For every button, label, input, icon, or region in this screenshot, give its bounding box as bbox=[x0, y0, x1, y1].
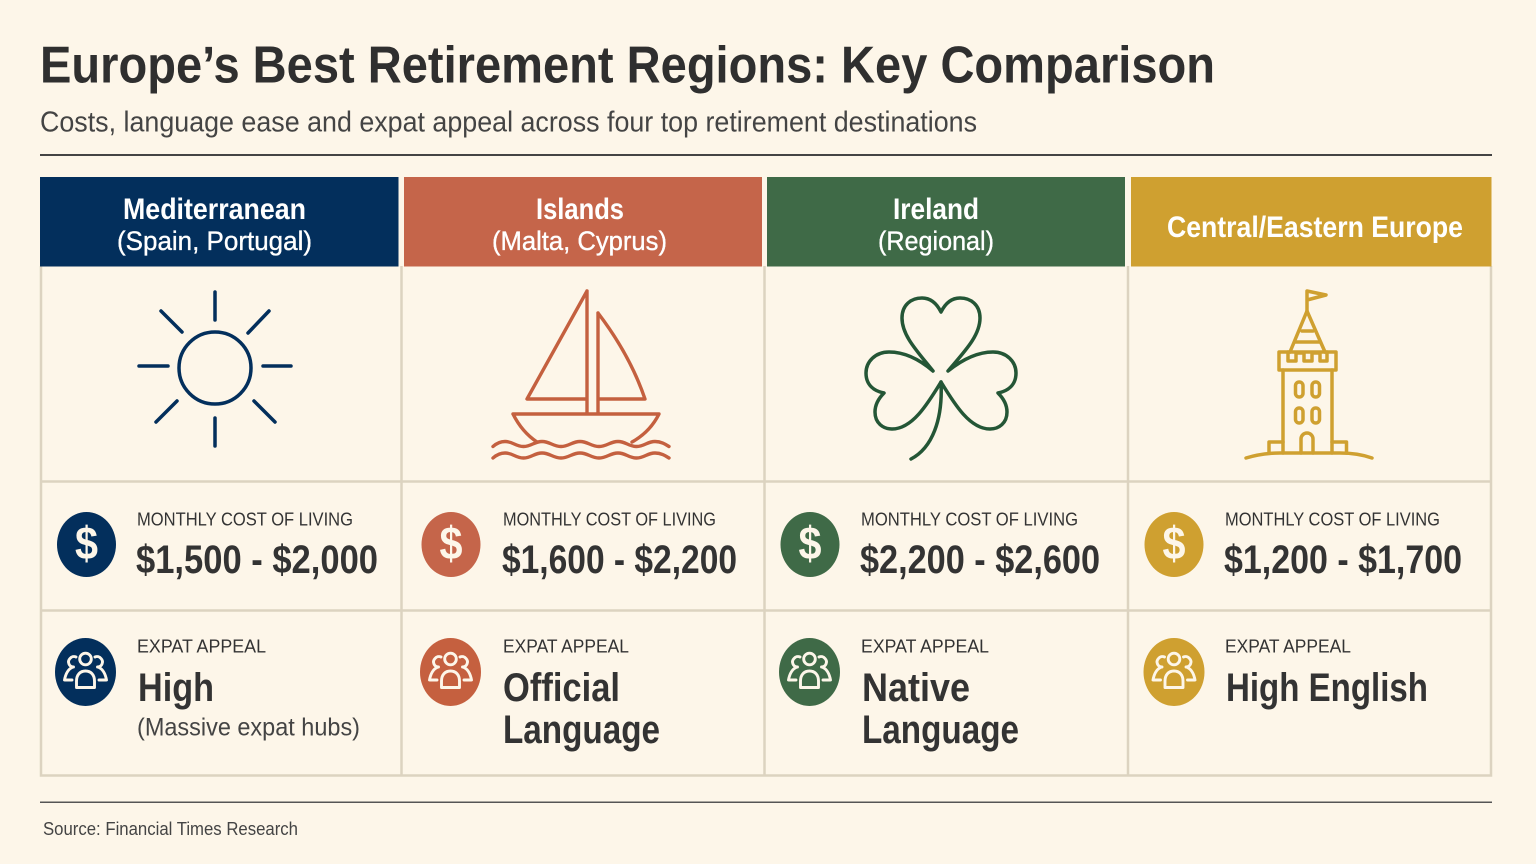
expat appeal: EXPAT APPEAL bbox=[503, 636, 629, 656]
header: Ireland bbox=[767, 177, 1125, 266]
icon: shamrock bbox=[866, 298, 1016, 459]
cost of living: MONTHLY COST OF LIVING bbox=[861, 510, 1078, 530]
header: Central/Eastern Europe: Central/Eastern Europe bbox=[1167, 211, 1463, 244]
cost of living: $2,200 - $2,600 bbox=[860, 538, 1100, 582]
icon: tower bbox=[1246, 291, 1372, 458]
comparison table grid bbox=[41, 266, 1491, 776]
cost of living: MONTHLY COST OF LIVING bbox=[137, 510, 353, 530]
expat appeal: Official bbox=[503, 666, 620, 710]
cost of living bbox=[1144, 510, 1462, 582]
subtitle: Costs, language ease and expat appeal across four top retirement destinations bbox=[40, 106, 977, 138]
cost of living: $1,500 - $2,000 bbox=[136, 538, 378, 582]
panel: Islands bbox=[404, 177, 762, 752]
expat appeal bbox=[779, 636, 1019, 752]
expat appeal: (Massive expat hubs) bbox=[137, 714, 360, 742]
header: Central/Eastern Europe bbox=[1131, 177, 1492, 266]
panel: Ireland bbox=[767, 177, 1125, 752]
expat appeal: Language bbox=[503, 708, 660, 752]
cost of living bbox=[780, 510, 1100, 582]
header: Ireland: Ireland bbox=[893, 193, 979, 226]
header: Mediterranean: (Spain, Portugal) bbox=[117, 226, 312, 256]
title: Europe’s Best Retirement Regions: Key Comparison bbox=[40, 36, 1215, 94]
panel: Mediterranean bbox=[40, 177, 398, 742]
cost of living: $ bbox=[75, 517, 98, 569]
expat appeal: EXPAT APPEAL bbox=[1225, 636, 1351, 656]
cost of living: $ bbox=[440, 517, 462, 569]
header: Islands: (Malta, Cyprus) bbox=[492, 226, 667, 256]
cost of living: $1,600 - $2,200 bbox=[502, 538, 737, 582]
expat appeal bbox=[420, 636, 660, 752]
expat appeal bbox=[1144, 636, 1428, 710]
cost of living: $1,200 - $1,700 bbox=[1224, 538, 1462, 582]
expat appeal: EXPAT APPEAL bbox=[137, 636, 266, 656]
cost of living bbox=[57, 510, 378, 582]
panel: Central/Eastern Europe bbox=[1131, 177, 1492, 710]
cost of living: $ bbox=[798, 517, 822, 569]
header: Islands bbox=[404, 177, 762, 266]
expat appeal: High bbox=[138, 666, 214, 710]
source note: Source: Financial Times Research bbox=[43, 819, 298, 839]
header: Mediterranean: Mediterranean bbox=[123, 193, 306, 226]
expat appeal: EXPAT APPEAL bbox=[861, 636, 989, 656]
cost of living bbox=[422, 510, 737, 582]
icon: sun bbox=[139, 292, 291, 446]
expat appeal: Native bbox=[862, 666, 970, 710]
expat appeal: Language bbox=[862, 708, 1019, 752]
cost of living: MONTHLY COST OF LIVING bbox=[503, 510, 716, 530]
cost of living: MONTHLY COST OF LIVING bbox=[1225, 510, 1440, 530]
expat appeal: High English bbox=[1226, 666, 1428, 710]
expat appeal bbox=[55, 636, 360, 742]
header: Mediterranean bbox=[40, 177, 398, 266]
icon: sailboat bbox=[493, 291, 669, 458]
header: Ireland: (Regional) bbox=[878, 226, 994, 256]
header: Islands: Islands bbox=[536, 193, 624, 226]
cost of living: $ bbox=[1162, 517, 1186, 569]
